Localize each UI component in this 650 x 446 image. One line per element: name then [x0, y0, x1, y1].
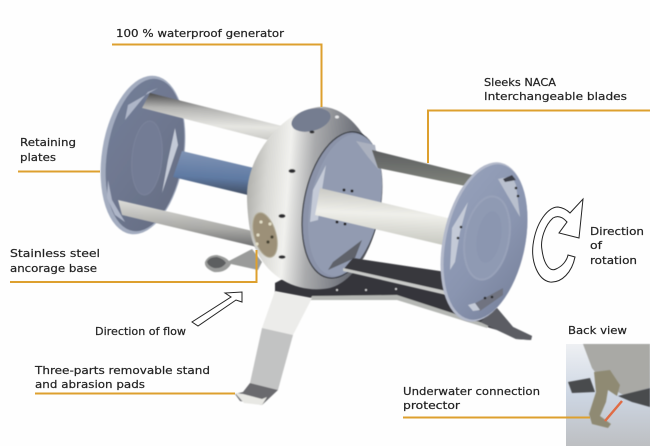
label: stand	[34, 364, 210, 391]
arrow: direction of flow	[192, 292, 242, 326]
right plate	[427, 154, 541, 330]
left plate	[90, 70, 196, 240]
leader line: anchorage base	[10, 250, 256, 282]
leader line: retaining plates	[18, 170, 100, 172]
label: blades: Sleeks NACA	[484, 76, 557, 89]
label: connection protector	[403, 385, 540, 412]
generator body	[247, 104, 380, 289]
label: stand: Three-parts removable stand	[34, 364, 210, 377]
label: direction of flow: Direction of flow	[95, 325, 186, 338]
label: direction of rotation	[590, 225, 644, 267]
label: anchorage base	[10, 247, 100, 275]
leader line: waterproof generator	[112, 44, 322, 107]
front disc	[291, 125, 393, 285]
photo: dark stand	[568, 378, 650, 407]
label: blades	[484, 76, 627, 103]
label: direction of rotation: Direction	[590, 225, 644, 238]
label: back view: Back view	[568, 324, 627, 337]
label: retaining plates: Retaining	[20, 136, 76, 149]
right rods	[315, 150, 476, 295]
photo: protector bracket	[589, 370, 620, 428]
leader line: stand	[35, 392, 235, 394]
back view photo inset	[566, 344, 650, 446]
photo: turbine body	[583, 344, 650, 396]
stand: right leg	[275, 268, 532, 340]
label: direction of rotation: rotation	[590, 254, 637, 267]
leader line: connection protector	[403, 416, 590, 418]
label: retaining plates: plates	[20, 151, 56, 164]
left leg of stand	[205, 249, 262, 272]
arrow: direction of rotation	[533, 199, 583, 282]
stand: front leg	[235, 291, 312, 405]
label: anchorage base: Stainless steel	[10, 247, 100, 260]
generator turbine assembly	[90, 70, 541, 405]
label: connection protector: Underwater connection	[403, 385, 540, 398]
label: stand: and abrasion pads	[35, 378, 145, 391]
left rods	[118, 93, 282, 247]
label: anchorage base: ancorage base	[10, 262, 97, 275]
label: direction of rotation: of	[590, 239, 602, 252]
label: retaining plates	[20, 136, 76, 164]
anchorage base plate	[248, 210, 282, 260]
heading: waterproof generator: 100 % waterproof generator	[116, 27, 285, 40]
label: connection protector: protector	[403, 399, 461, 412]
label: blades: Interchangeable blades	[484, 90, 627, 103]
photo: orange cable	[605, 401, 622, 421]
leader line: blades	[428, 110, 650, 163]
